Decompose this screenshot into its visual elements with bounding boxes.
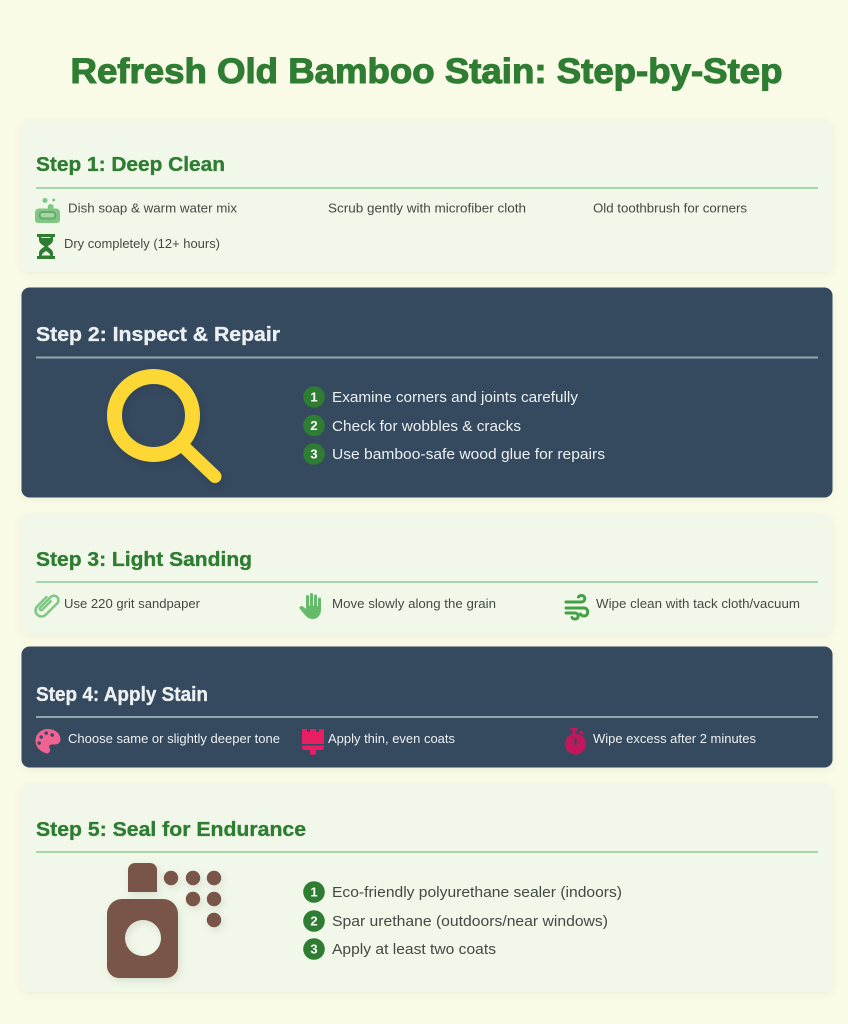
list: inspect steps: 2 bbox=[310, 418, 318, 433]
text: dry: Dry completely (12+ hours) bbox=[64, 236, 220, 251]
text: move slowly: Move slowly along the grain bbox=[332, 596, 496, 611]
heading: step 1: Step 1: Deep Clean bbox=[36, 153, 225, 176]
heading: step 4: Step 4: Apply Stain bbox=[36, 683, 208, 706]
icon: magnifying glass bbox=[114, 376, 215, 476]
title: Refresh Old Bamboo Stain: Step-by-Step bbox=[70, 52, 782, 91]
panel: step 1 deep clean bbox=[21, 120, 832, 272]
list: inspect steps: 1 bbox=[310, 390, 318, 404]
icon: soap bbox=[35, 198, 60, 223]
text: thin coats: Apply thin, even coats bbox=[328, 731, 455, 746]
list: inspect steps: Check for wobbles & cracks bbox=[332, 419, 521, 435]
panel: step 5 seal for endurance bbox=[21, 784, 832, 992]
list: inspect steps: 3 bbox=[310, 446, 318, 462]
icon: spray bottle bbox=[107, 863, 221, 978]
list: inspect steps: Use bamboo-safe wood glue for repairs bbox=[332, 447, 605, 463]
heading: step 5: Step 5: Seal for Endurance bbox=[36, 818, 306, 841]
icon: paperclip bbox=[33, 592, 60, 619]
list: sealer steps: Spar urethane (outdoors/near windows) bbox=[332, 914, 608, 930]
panel: step 2 inspect and repair bbox=[22, 288, 832, 498]
text: toothbrush: Old toothbrush for corners bbox=[593, 200, 747, 216]
text: scrub: Scrub gently with microfiber cloth bbox=[328, 200, 526, 216]
icon: palette bbox=[36, 729, 60, 753]
text: choose tone: Choose same or slightly deeper tone bbox=[68, 731, 280, 746]
list: sealer steps: Eco-friendly polyurethane sealer (indoors) bbox=[332, 885, 622, 901]
list: sealer steps: 1 bbox=[310, 884, 318, 900]
panel: step 4 apply stain bbox=[22, 646, 832, 768]
list: sealer steps: 3 bbox=[310, 942, 318, 956]
heading: step 3: Step 3: Light Sanding bbox=[36, 548, 252, 571]
text: sandpaper: Use 220 grit sandpaper bbox=[64, 596, 201, 611]
panel: step 3 light sanding bbox=[21, 514, 832, 634]
list: inspect steps bbox=[303, 386, 605, 465]
icon: paintbrush bbox=[302, 729, 324, 755]
list: inspect steps: Examine corners and joints carefully bbox=[332, 390, 579, 406]
list: sealer steps bbox=[303, 881, 622, 960]
text: wipe excess: Wipe excess after 2 minutes bbox=[593, 731, 756, 746]
text: wipe clean: Wipe clean with tack cloth/vacuum bbox=[596, 596, 800, 611]
list: sealer steps: Apply at least two coats bbox=[332, 942, 496, 958]
text: dish soap: Dish soap & warm water mix bbox=[68, 200, 238, 216]
icon: hourglass bbox=[37, 234, 55, 259]
icon: wind bbox=[566, 596, 588, 619]
list: sealer steps: 2 bbox=[310, 914, 318, 928]
heading: step 2: Step 2: Inspect & Repair bbox=[36, 323, 280, 346]
icon: hand bbox=[300, 593, 321, 619]
icon: stopwatch bbox=[565, 728, 586, 754]
